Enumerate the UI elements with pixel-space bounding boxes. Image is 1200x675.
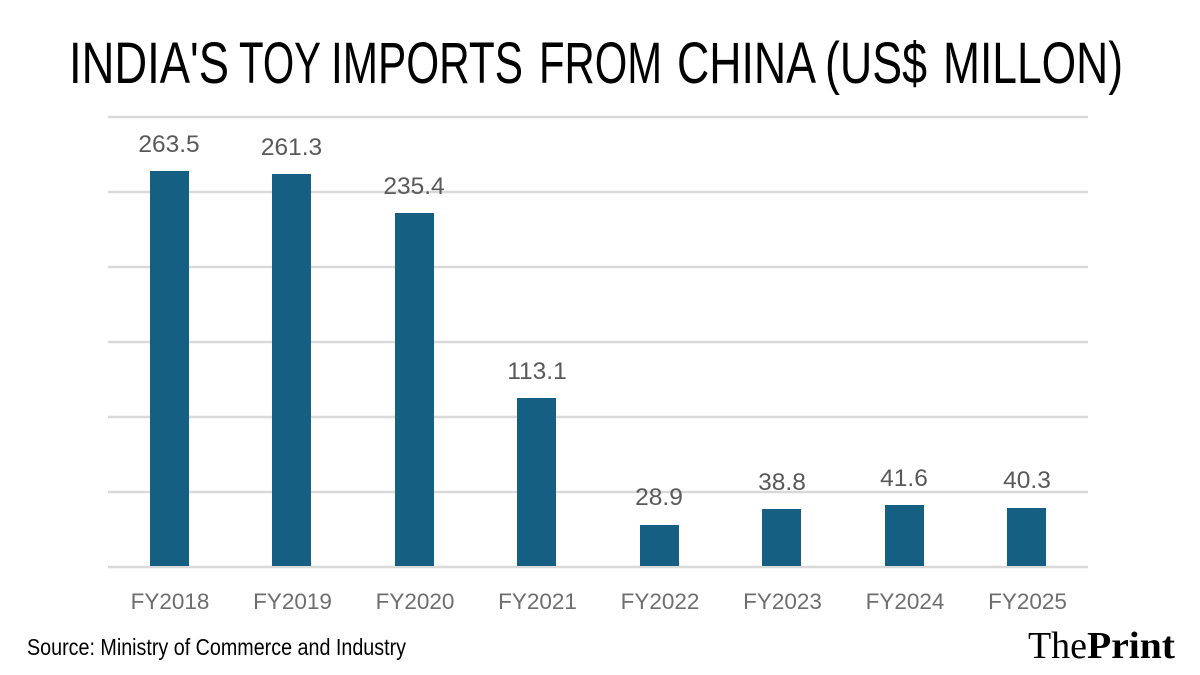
title: IMPORTS — [331, 31, 523, 96]
category axis labels: FY2019 — [253, 589, 332, 614]
value labels: 41.6 — [880, 465, 928, 492]
title: MILLON) — [943, 31, 1123, 96]
title: (US$ — [825, 31, 927, 96]
title: TOY — [239, 31, 321, 96]
title: INDIA'S — [69, 31, 229, 96]
value labels: 38.8 — [758, 469, 806, 496]
value labels: 113.1 — [507, 358, 567, 385]
category axis labels: FY2021 — [498, 589, 577, 614]
value labels — [138, 131, 1051, 511]
value labels: 263.5 — [138, 131, 200, 158]
value labels: 40.3 — [1003, 467, 1051, 494]
value labels: 28.9 — [635, 484, 683, 511]
title — [69, 31, 1123, 96]
source note: Source: Ministry of Commerce and Industry — [27, 634, 406, 660]
category axis labels — [131, 589, 1067, 614]
category axis labels: FY2023 — [743, 589, 822, 614]
category axis labels: FY2022 — [621, 589, 699, 614]
value labels: 235.4 — [383, 173, 445, 200]
logo: ThePrint: Print — [1087, 625, 1175, 667]
category axis labels: FY2025 — [988, 589, 1067, 614]
logo: ThePrint: The — [1028, 625, 1087, 667]
value labels: 261.3 — [261, 134, 322, 161]
category axis labels: FY2020 — [376, 589, 454, 614]
title: CHINA — [677, 31, 816, 96]
logo: ThePrint — [1028, 625, 1175, 667]
title: FROM — [539, 31, 662, 96]
category axis labels: FY2024 — [866, 589, 944, 614]
bar chart — [108, 117, 1088, 614]
bars — [150, 171, 1046, 566]
category axis labels: FY2018 — [131, 589, 209, 614]
